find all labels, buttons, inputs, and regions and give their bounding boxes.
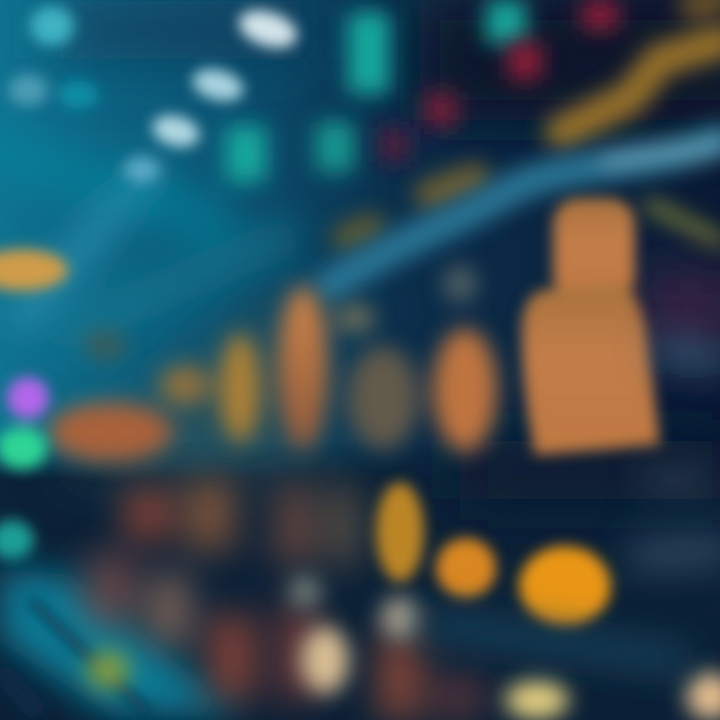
- background: tonal patches: [60, 0, 720, 500]
- grey-blue lines, lower right: [430, 350, 720, 660]
- background: dark lower field: [0, 440, 720, 720]
- dark red blocks: [378, 0, 618, 162]
- descending row of orange bars: [48, 265, 497, 462]
- pale lower blobs: [86, 575, 720, 720]
- blue wave line: [330, 140, 720, 285]
- reflected muted bars, lower centre: [85, 480, 482, 720]
- gold rising trend line: [345, 0, 720, 240]
- light diagonal beams, upper left: [0, 150, 280, 330]
- pale rectangles, upper left: [8, 4, 302, 183]
- orange figure: [522, 198, 660, 455]
- teal blocks: [226, 0, 526, 182]
- gold blob, left edge: [0, 249, 68, 291]
- dark diagonal streaks, lower left: [0, 600, 150, 715]
- teal diagonal band, lower left: [0, 570, 240, 715]
- orange lower blobs: [376, 482, 611, 626]
- purple and green glow dots: [0, 377, 49, 560]
